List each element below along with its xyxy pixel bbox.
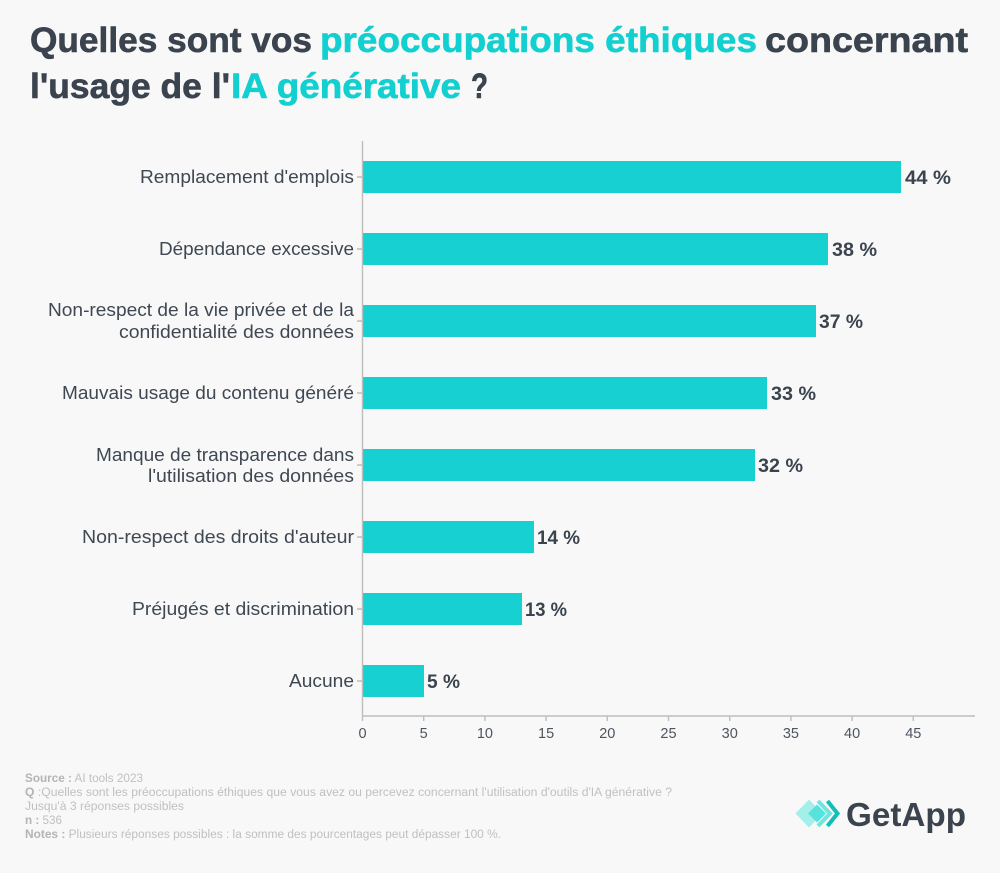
value labels: 38 % — [832, 240, 877, 261]
title: l'usage de l' — [30, 67, 230, 106]
value labels: 44 % — [905, 168, 951, 189]
title — [30, 21, 968, 106]
source notes: Notes : Plusieurs réponses possibles : la somme des pourcentages peut dépasser 100 %. — [25, 829, 501, 841]
category labels — [48, 167, 355, 691]
title: Quelles sont vos — [30, 21, 312, 60]
value labels — [427, 168, 951, 693]
category labels: confidentialité des données — [119, 322, 354, 342]
value labels: 37 % — [819, 312, 863, 333]
source notes — [25, 773, 672, 841]
value labels: 33 % — [771, 384, 816, 405]
source notes: Jusqu'à 3 réponses possibles — [25, 801, 184, 813]
title: IA générative — [231, 67, 461, 106]
icon: diamonds and chevrons — [796, 800, 838, 828]
axis tick labels: 40 — [844, 726, 860, 742]
source notes: Source : AI tools 2023 — [25, 773, 143, 785]
axes — [357, 141, 975, 721]
title: concernant — [765, 21, 968, 60]
value labels: 5 % — [427, 672, 460, 693]
axis tick labels: 5 — [420, 726, 428, 742]
bars — [363, 161, 901, 697]
category labels: Remplacement d'emplois — [140, 167, 354, 187]
axis tick labels: 0 — [358, 726, 367, 742]
category labels: Non-respect de la vie privée et de la — [48, 300, 355, 320]
category labels: Préjugés et discrimination — [132, 599, 354, 619]
category labels: Dépendance excessive — [159, 239, 354, 259]
axis tick labels — [358, 726, 921, 742]
value labels: 14 % — [537, 528, 580, 549]
bar chart — [48, 141, 975, 742]
source notes: n : 536 — [25, 815, 62, 827]
category labels: Mauvais usage du contenu généré — [62, 383, 354, 403]
category labels: Aucune — [289, 671, 354, 691]
axis tick labels: 30 — [722, 726, 738, 742]
category labels: Manque de transparence dans — [96, 445, 354, 465]
axis tick labels: 10 — [477, 726, 493, 742]
axis tick labels: 20 — [599, 726, 615, 742]
axis tick labels: 35 — [783, 726, 799, 742]
axis tick labels: 45 — [905, 726, 921, 742]
value labels: 32 % — [758, 456, 803, 477]
axis tick labels: 25 — [660, 726, 677, 742]
source notes: Q :Quelles sont les préoccupations éthiques que vous avez ou percevez concernant l'utilisation d'outils d'IA générative ? — [25, 787, 672, 799]
value labels: 13 % — [525, 600, 567, 621]
wordmark: GetApp — [846, 796, 966, 833]
title: préoccupations éthiques — [320, 21, 757, 60]
category labels: l'utilisation des données — [148, 466, 354, 486]
axis tick labels: 15 — [538, 726, 554, 742]
category labels: Non-respect des droits d'auteur — [82, 527, 354, 547]
logo: GetApp — [796, 796, 966, 833]
title: ? — [471, 67, 488, 106]
